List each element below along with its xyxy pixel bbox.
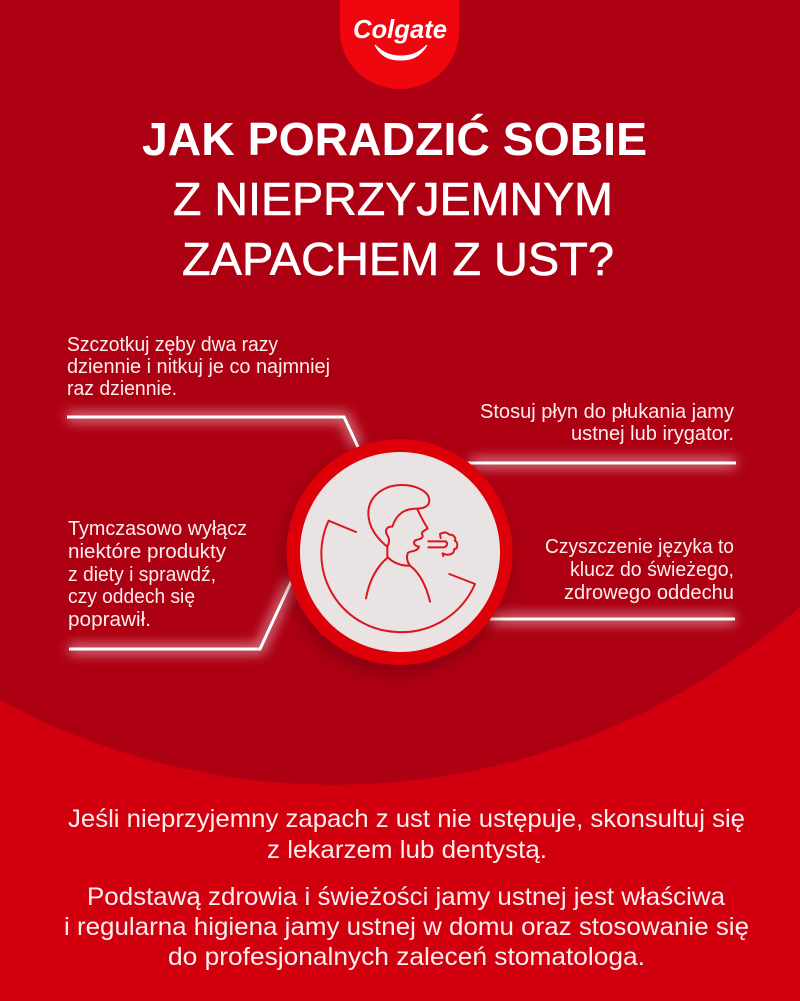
title: JAK PORADZIĆ SOBIE: [142, 113, 647, 165]
icon: shoulders: [366, 558, 430, 602]
connector: top right: [468, 458, 736, 468]
logo wordmark: Colgate: [353, 14, 447, 44]
icon: hair: [368, 485, 429, 547]
tip: mouthwash or irrigator: ustnej lub irygator.: [571, 423, 734, 445]
tip: diet: [68, 518, 247, 631]
tip: diet: niektóre produkty: [68, 541, 226, 563]
central badge: [283, 439, 512, 673]
logo smile: [375, 45, 427, 60]
tip: diet: czy oddech się: [68, 586, 195, 608]
closing text: oral hygiene: Podstawą zdrowia i świeżości jamy ustnej jest właściwa: [87, 883, 725, 911]
title: ZAPACHEM Z UST?: [182, 233, 614, 285]
title: Z NIEPRZYJEMNYM: [173, 173, 613, 225]
tip: tongue cleaning: klucz do świeżego,: [570, 559, 734, 581]
icon: open circle arc: [321, 521, 475, 632]
tip: tongue cleaning: Czyszczenie języka to: [545, 536, 734, 558]
title: [142, 113, 647, 285]
closing text: oral hygiene: do profesjonalnych zaleceń stomatologa.: [168, 943, 645, 971]
tip: brushing and flossing: raz dziennie.: [67, 378, 177, 400]
closing text: oral hygiene: [64, 883, 749, 971]
tip: tongue cleaning: [545, 536, 734, 604]
icon: person exhaling bad breath: [321, 485, 475, 632]
tip: brushing and flossing: [67, 334, 330, 400]
connector: top left: [67, 417, 358, 447]
tip: mouthwash or irrigator: [480, 401, 734, 445]
icon: breath cloud: [428, 532, 457, 556]
closing text: see a dentist: z lekarzem lub dentystą.: [267, 836, 547, 864]
logo badge: [340, 0, 459, 89]
closing text: see a dentist: Jeśli nieprzyjemny zapach z ust nie ustępuje, skonsultuj się: [68, 805, 745, 833]
connector: bottom right: [488, 614, 735, 624]
icon: face: [387, 509, 428, 566]
tip: brushing and flossing: dziennie i nitkuj je co najmniej: [67, 356, 330, 378]
background: dark upper area with curved edge: [0, 0, 800, 785]
connector: bottom left: [69, 580, 292, 649]
closing text: oral hygiene: i regularna higiena jamy ustnej w domu oraz stosowanie się: [64, 913, 749, 941]
tip: brushing and flossing: Szczotkuj zęby dwa razy: [67, 334, 278, 356]
tip: diet: z diety i sprawdź,: [68, 564, 216, 586]
tip: diet: poprawił.: [68, 609, 151, 631]
closing text: see a dentist: [68, 805, 745, 864]
tip: tongue cleaning: zdrowego oddechu: [564, 582, 734, 604]
tip: diet: Tymczasowo wyłącz: [68, 518, 247, 540]
tip: mouthwash or irrigator: Stosuj płyn do płukania jamy: [480, 401, 734, 423]
